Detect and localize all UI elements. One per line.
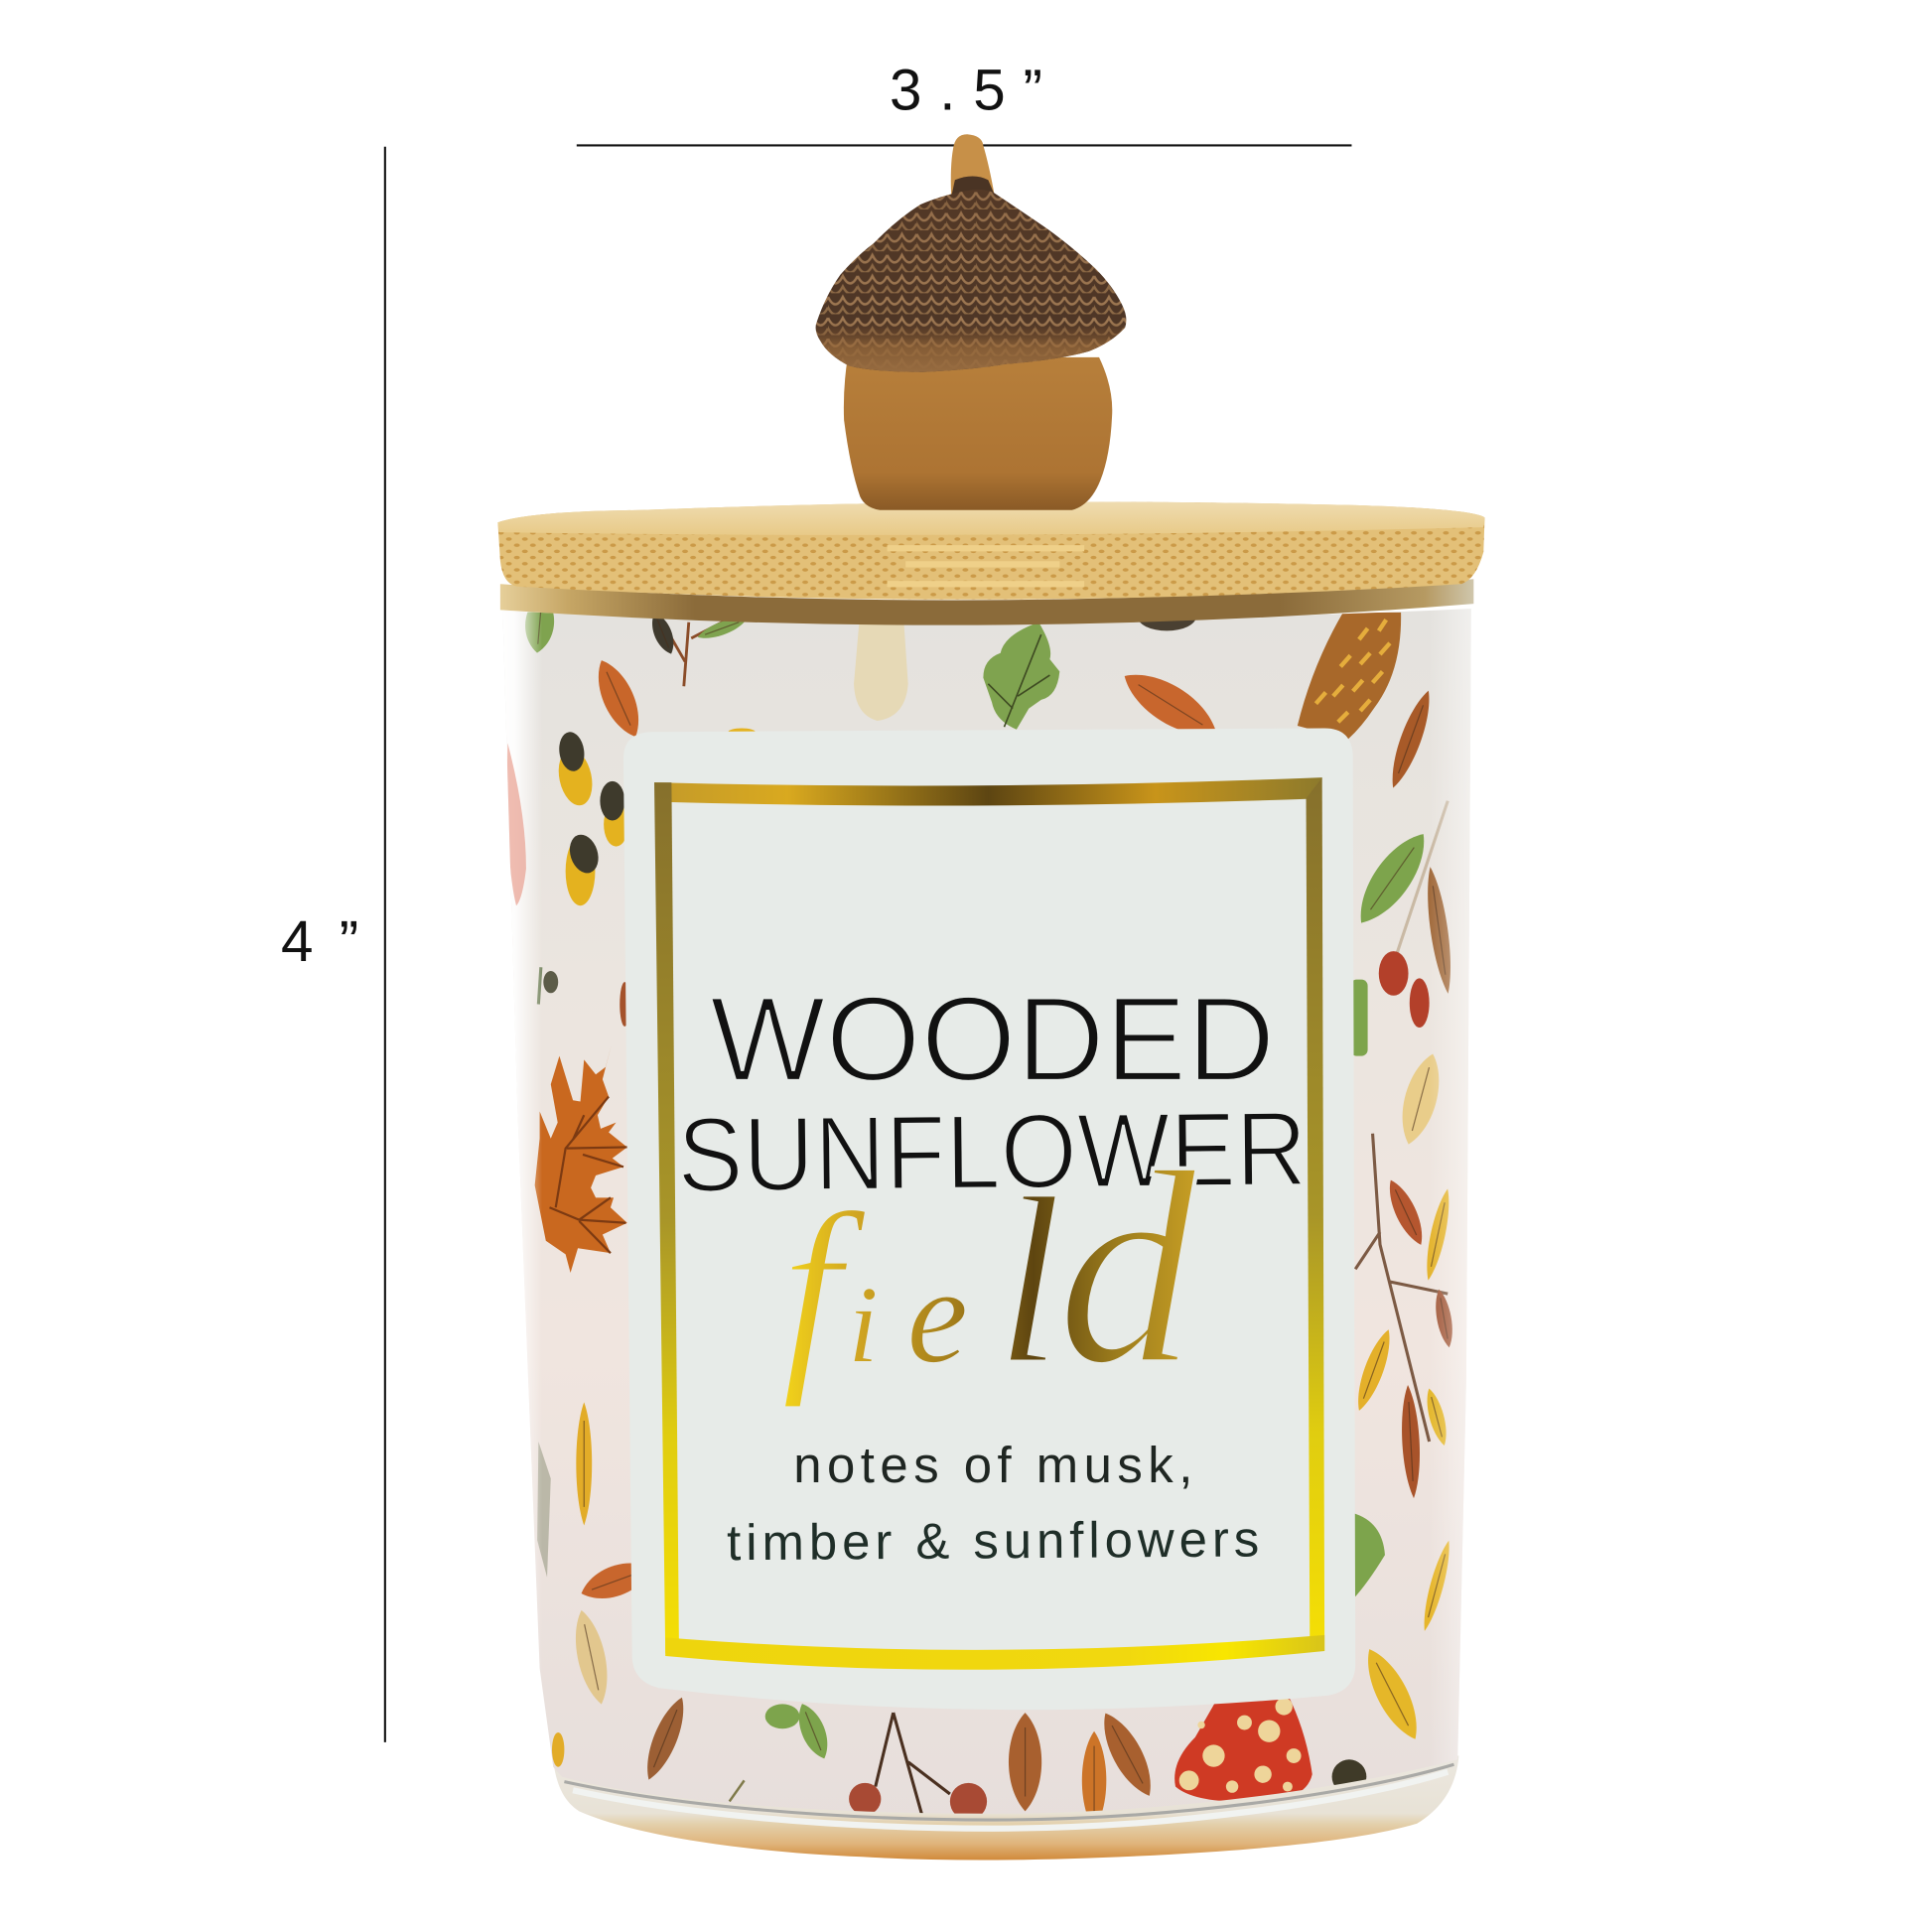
gold frame	[654, 777, 1324, 1670]
green scrap	[1353, 979, 1368, 1056]
pale yellow leaf	[1402, 1054, 1440, 1144]
pinecone	[1298, 613, 1401, 740]
small twig	[730, 1780, 745, 1801]
leaf: green top left	[525, 612, 554, 653]
acorn stem	[951, 134, 996, 198]
scent notes line two: timber & sunflowers	[727, 1510, 1259, 1571]
right branch and leaves	[1350, 1134, 1456, 1499]
paper edge fade	[492, 604, 1478, 1849]
script word field: f	[781, 1169, 867, 1409]
lid top surface	[497, 501, 1484, 535]
green leaf bottom	[765, 1700, 835, 1763]
brown leaves bottom	[1009, 1707, 1162, 1830]
jar glass base	[553, 1756, 1458, 1860]
yellow tip above label	[728, 728, 756, 736]
glass rim under lid	[500, 579, 1473, 625]
maple leaf	[535, 1041, 627, 1273]
acorn cap	[816, 190, 1126, 372]
orange leaf	[1124, 675, 1215, 729]
script word field: i	[848, 1263, 879, 1386]
maple veins	[550, 1097, 627, 1253]
green oak leaf	[983, 622, 1059, 730]
height label: 4”	[281, 909, 358, 974]
dark acorn top	[1140, 620, 1195, 631]
green leaf lower right	[1353, 1513, 1385, 1599]
patterned paper wrap	[492, 593, 1478, 1849]
script word field: e	[906, 1239, 968, 1392]
grey smear left	[537, 1442, 551, 1578]
yellow leaf bottom right	[1356, 1642, 1429, 1746]
green leaf right	[1360, 834, 1424, 923]
acorn knob	[816, 134, 1126, 510]
pinecone scale marks	[1315, 620, 1390, 722]
pale leaf lower left	[568, 1607, 615, 1707]
product photo: candle jar with dimensions	[282, 69, 1485, 1861]
brown leaf right	[1428, 867, 1450, 994]
title line two: SUNFLOWER	[677, 1088, 1308, 1214]
mushroom stem	[854, 624, 908, 721]
scent notes line one: notes of musk,	[793, 1437, 1192, 1493]
brown leaf upper right	[1392, 691, 1430, 788]
small grey sprig	[538, 967, 558, 1004]
script word field: l	[996, 1148, 1062, 1414]
branch with two leaves	[652, 619, 745, 687]
red berries	[1379, 951, 1430, 1028]
height dimension line	[384, 147, 386, 1742]
stem right	[1396, 800, 1449, 953]
width dimension line	[577, 144, 1351, 146]
acorns left	[558, 732, 624, 905]
small brown scrap	[620, 982, 626, 1027]
small yellow scrap	[552, 1732, 564, 1767]
yellow leaf lower right	[1419, 1539, 1455, 1632]
faded pink leaf	[507, 743, 526, 905]
front label	[623, 728, 1355, 1710]
bamboo lid	[497, 501, 1484, 600]
dark acorn bottom	[1332, 1759, 1366, 1794]
orange leaf left	[598, 660, 639, 737]
width label: 3.5”	[890, 58, 1042, 122]
yellow leaf left	[576, 1402, 592, 1525]
red mushroom	[1174, 1694, 1312, 1802]
script word field: d	[1057, 1113, 1200, 1422]
orange leaf lower left	[576, 1554, 656, 1607]
acorn nut	[844, 357, 1112, 510]
brown leaf bottom	[638, 1693, 693, 1784]
lid centre grain	[888, 548, 1084, 584]
title line one: WOODED	[710, 971, 1276, 1106]
berry twigs	[849, 1713, 987, 1820]
